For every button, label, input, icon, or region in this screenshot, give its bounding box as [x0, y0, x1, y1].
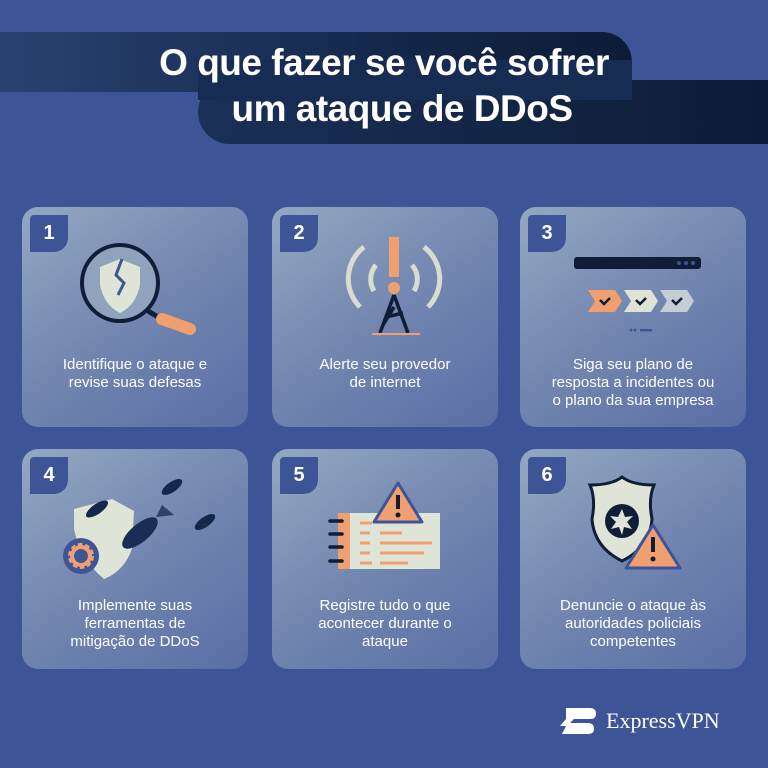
- icon: police badge warning: [588, 475, 682, 570]
- number 3: [528, 215, 566, 252]
- caption 4: [70, 597, 200, 650]
- caption 4: mitigação de DDoS: [70, 633, 200, 650]
- caption 3: o plano da sua empresa: [553, 392, 713, 409]
- title: um ataque de DDoS: [232, 88, 572, 129]
- caption 4: Implemente suas: [78, 597, 192, 614]
- title banner: [0, 32, 768, 144]
- caption 6: Denuncie o ataque às: [560, 597, 706, 614]
- caption 5: Registre tudo o que: [320, 597, 450, 614]
- icon: logo mark: [560, 708, 596, 734]
- icon: plan checklist: [574, 257, 701, 332]
- number 4: [30, 457, 68, 494]
- icon: shield bombs gear: [63, 479, 216, 579]
- title: O que fazer se você sofrer: [159, 42, 609, 83]
- number 2: [280, 215, 318, 252]
- caption 1: Identifique o ataque e: [63, 356, 207, 373]
- caption 3: [552, 356, 714, 409]
- caption 6: autoridades policiais: [565, 615, 701, 632]
- caption 5: ataque: [362, 633, 408, 650]
- panel: step 4: [22, 449, 248, 669]
- number 6: 6: [541, 464, 553, 486]
- number 4: 4: [43, 464, 55, 486]
- panel: step 2: [272, 207, 498, 427]
- number 6: [528, 457, 566, 494]
- logo: ExpressVPN: [560, 708, 720, 734]
- panel: step 6: [520, 449, 746, 669]
- panel: step 1: [22, 207, 248, 427]
- number 2: 2: [293, 222, 305, 244]
- number 1: [30, 215, 68, 252]
- caption 1: [63, 356, 207, 391]
- icon: magnifier shield: [80, 243, 196, 335]
- panel: step 5: [272, 449, 498, 669]
- number 3: 3: [541, 222, 553, 244]
- icon: notebook warning: [328, 481, 440, 569]
- caption 4: ferramentas de: [85, 615, 185, 632]
- number 1: 1: [43, 222, 55, 244]
- brand name: ExpressVPN: [606, 708, 720, 733]
- caption 2: Alerte seu provedor: [320, 356, 450, 373]
- caption 2: de internet: [350, 374, 420, 391]
- number 5: 5: [293, 464, 305, 486]
- panel: step 3: [520, 207, 746, 427]
- caption 2: [320, 356, 450, 391]
- title: [159, 42, 609, 129]
- caption 3: resposta a incidentes ou: [552, 374, 714, 391]
- caption 6: competentes: [590, 633, 676, 650]
- caption 1: revise suas defesas: [69, 374, 201, 391]
- icon: antenna alert: [346, 237, 442, 335]
- number 5: [280, 457, 318, 494]
- caption 6: [560, 597, 706, 650]
- caption 3: Siga seu plano de: [573, 356, 693, 373]
- caption 5: [318, 597, 452, 650]
- caption 5: acontecer durante o: [318, 615, 452, 632]
